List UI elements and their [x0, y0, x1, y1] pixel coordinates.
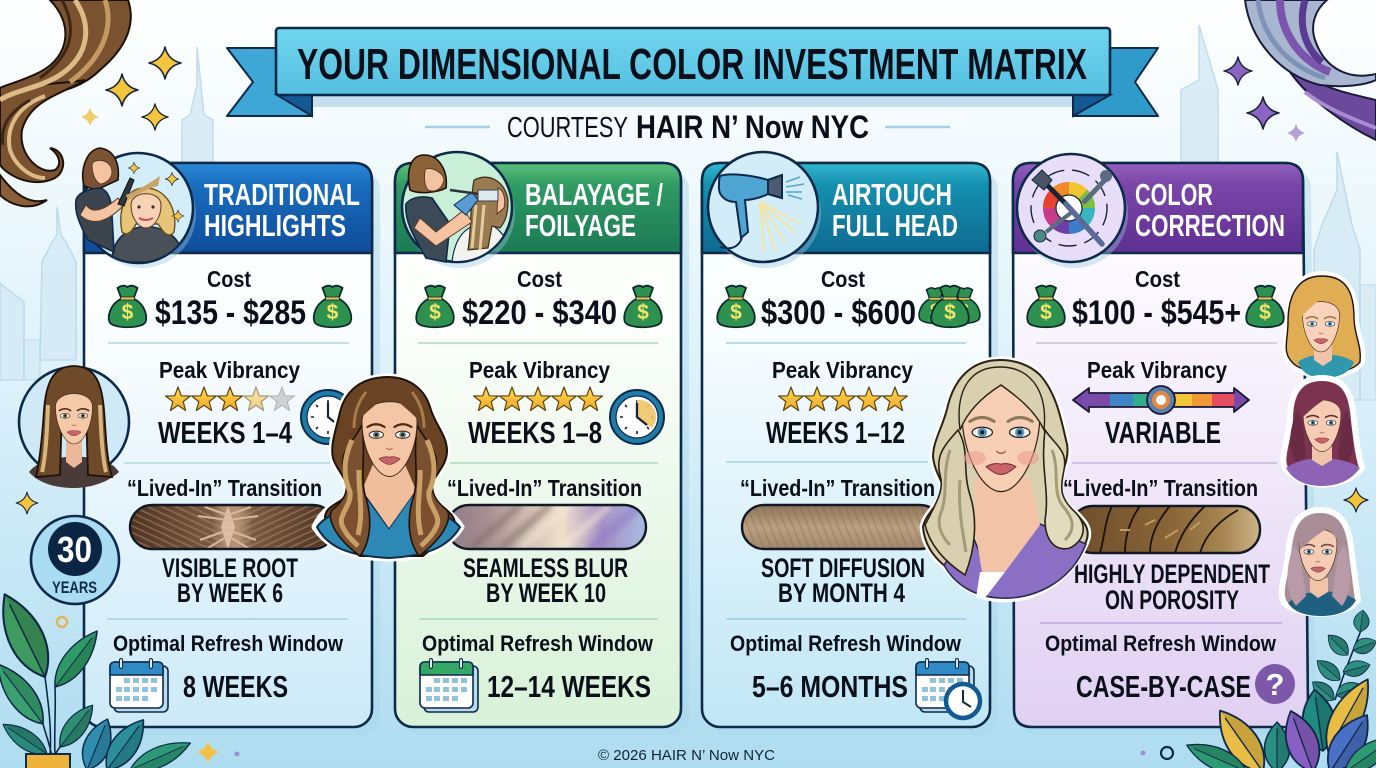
- panel: traditional highlights: $135 - $285: [155, 294, 306, 332]
- skyline left: [0, 47, 213, 380]
- refresh: Optimal Refresh Window: [422, 631, 654, 656]
- footer: © 2026 HAIR N’ Now NYC: [598, 747, 775, 764]
- panel: airtouch: WEEKS 1–12: [766, 415, 905, 450]
- hair swirl top left: [0, 0, 131, 206]
- icon: money bags: [919, 286, 980, 327]
- subtitle: [425, 109, 950, 145]
- heading: [832, 177, 958, 243]
- icon: question mark: ?: [1266, 667, 1284, 702]
- panel: color correction: CASE-BY-CASE: [1076, 669, 1251, 704]
- icon: calendar with clock: [916, 660, 980, 718]
- panel: traditional highlights: VISIBLE ROOT: [162, 553, 298, 583]
- heading: CORRECTION: [1135, 208, 1285, 243]
- badge: 30 years: YEARS: [52, 578, 97, 597]
- portrait: mauve client: [1282, 510, 1358, 616]
- subtitle: COURTESY: [507, 112, 628, 144]
- panel: airtouch: BY MONTH 4: [778, 578, 905, 608]
- panel: balayage: [395, 152, 689, 735]
- heading: HIGHLIGHTS: [204, 208, 346, 243]
- panel: traditional highlights: WEEKS 1–4: [158, 415, 293, 450]
- portrait: blonde client: [1285, 274, 1362, 378]
- panel: airtouch: 5–6 MONTHS: [752, 669, 908, 704]
- refresh: Optimal Refresh Window: [730, 631, 962, 656]
- heading: COLOR: [1135, 177, 1213, 212]
- heading: FULL HEAD: [832, 208, 958, 243]
- icon: rainbow arrow: [1073, 386, 1249, 414]
- title text: YOUR DIMENSIONAL COLOR INVESTMENT MATRIX: [297, 40, 1087, 89]
- heading: TRADITIONAL: [204, 177, 360, 212]
- cost: Cost: [1135, 266, 1180, 292]
- cost: Cost: [821, 266, 865, 292]
- icon: color wheel and tools: [1017, 154, 1128, 268]
- icon: clock: [301, 390, 355, 444]
- panel: balayage: 12–14 WEEKS: [487, 669, 651, 704]
- heading: [1135, 177, 1285, 243]
- panel: color correction: $100 - $545+: [1072, 294, 1241, 332]
- peak vibrancy: Peak Vibrancy: [1087, 357, 1227, 383]
- panel: balayage: WEEKS 1–8: [468, 415, 602, 450]
- sparkle left gold: [16, 492, 38, 514]
- panel: color correction: ON POROSITY: [1105, 585, 1239, 615]
- ring left: [57, 617, 67, 627]
- panel: airtouch: [702, 152, 998, 735]
- panel: color correction: HIGHLY DEPENDENT: [1074, 559, 1270, 589]
- icon: stylist and client: [76, 148, 196, 268]
- panel: airtouch: $300 - $600: [761, 294, 916, 332]
- peak vibrancy: Peak Vibrancy: [469, 357, 610, 383]
- panel: balayage: $220 - $340: [462, 294, 617, 332]
- hair swatch: [130, 505, 335, 549]
- panel: color correction: VARIABLE: [1105, 415, 1221, 450]
- panel: traditional highlights: BY WEEK 6: [177, 578, 283, 608]
- sparkles purple: [1224, 57, 1305, 142]
- header band: [84, 163, 372, 253]
- panel: balayage: BY WEEK 10: [486, 578, 606, 608]
- header band: [1013, 163, 1303, 253]
- panel: traditional highlights: 8 WEEKS: [183, 669, 288, 704]
- panel: color correction: [1013, 154, 1316, 735]
- peak vibrancy: Peak Vibrancy: [159, 357, 300, 383]
- heading: BALAYAGE /: [525, 177, 663, 212]
- subtitle: HAIR N’ Now NYC: [636, 109, 869, 145]
- dots: [234, 747, 1173, 759]
- icon: stylist painting hair: [402, 152, 515, 268]
- plant right: [1182, 609, 1376, 768]
- portrait: blonde senior stylist: [923, 360, 1088, 599]
- icon: question mark: [1255, 664, 1295, 704]
- panel: airtouch: SOFT DIFFUSION: [761, 553, 925, 583]
- header band: [395, 163, 681, 253]
- badge: 30 years: 30: [57, 529, 92, 570]
- transition: “Lived-In” Transition: [447, 475, 642, 501]
- refresh: Optimal Refresh Window: [1045, 631, 1277, 656]
- plant left: [0, 587, 194, 768]
- portrait: circle woman left: [19, 366, 129, 488]
- portrait: brunette stylist: [315, 377, 461, 558]
- cost: Cost: [207, 266, 251, 292]
- peak vibrancy: Peak Vibrancy: [772, 357, 913, 383]
- heading: AIRTOUCH: [832, 177, 952, 212]
- header band: [702, 163, 990, 253]
- title banner: [227, 28, 1158, 116]
- hair swatch: [447, 505, 646, 549]
- badge: 30 years: [31, 516, 119, 604]
- sparkle right gold: [1344, 488, 1368, 512]
- refresh: Optimal Refresh Window: [113, 631, 344, 656]
- cost: Cost: [517, 266, 562, 292]
- heading: [204, 177, 360, 243]
- hair swirl top right: [1245, 0, 1376, 140]
- transition: “Lived-In” Transition: [740, 475, 935, 501]
- transition: “Lived-In” Transition: [127, 475, 322, 501]
- hair swatch: [742, 505, 942, 549]
- decorative sparkle bottom: [196, 741, 220, 764]
- icon: clock: [610, 390, 664, 444]
- portrait: burgundy client: [1283, 378, 1362, 486]
- panel: balayage: SEAMLESS BLUR: [463, 553, 628, 583]
- pot: [26, 754, 70, 768]
- sparkles gold: [81, 47, 181, 130]
- heading: [525, 177, 663, 243]
- icon: hair dryer: [708, 152, 821, 268]
- heading: FOILYAGE: [525, 208, 636, 243]
- hair swatch: [1070, 506, 1260, 553]
- transition: “Lived-In” Transition: [1063, 475, 1258, 501]
- skyline right: [1181, 25, 1376, 400]
- panel: traditional highlights: [76, 148, 380, 735]
